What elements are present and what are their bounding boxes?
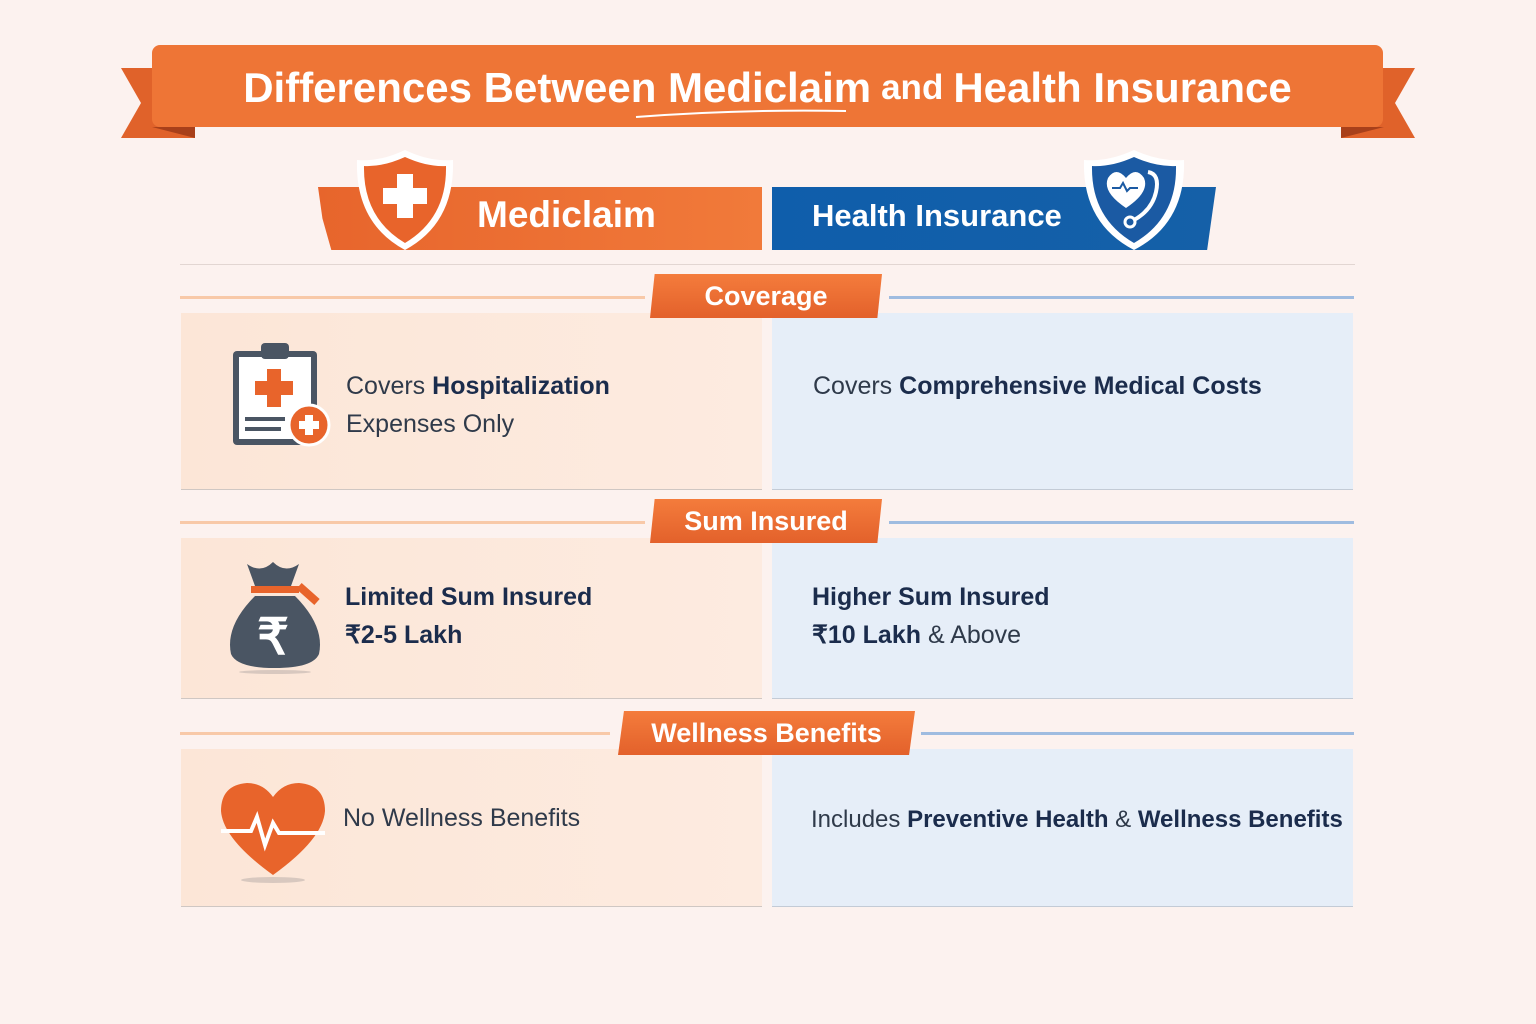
header: Mediclaim bbox=[318, 150, 762, 250]
tag: Wellness Benefits: Wellness Benefits bbox=[651, 718, 882, 748]
panel: sum health insurance: ₹10 Lakh & Above bbox=[812, 621, 1021, 649]
icon: money bag bbox=[230, 562, 320, 674]
icon: money bag: ₹ bbox=[257, 609, 289, 665]
tag: Wellness Benefits bbox=[618, 711, 915, 755]
text: Expenses Only bbox=[346, 410, 514, 438]
header: Health Insurance bbox=[772, 150, 1216, 250]
panel: sum mediclaim: Limited Sum Insured bbox=[345, 583, 592, 611]
tag: Sum Insured: Sum Insured bbox=[684, 506, 848, 536]
text: Covers Hospitalization bbox=[346, 372, 610, 400]
icon: clipboard bbox=[233, 343, 330, 446]
panel: sum health insurance bbox=[772, 538, 1353, 699]
panel: wellness mediclaim: No Wellness Benefits bbox=[343, 804, 580, 832]
title text: and bbox=[881, 68, 943, 107]
panel: coverage health insurance: Covers Comprehensive Medical Costs bbox=[813, 372, 1262, 400]
panel: wellness health insurance bbox=[772, 749, 1353, 907]
icon: blue shield with stethoscope heart bbox=[1084, 150, 1184, 250]
tag: Coverage bbox=[650, 274, 882, 318]
section: Wellness bbox=[180, 732, 610, 735]
panel: wellness mediclaim bbox=[181, 749, 762, 907]
text bbox=[346, 372, 610, 438]
title ribbon bbox=[121, 45, 1415, 138]
header text: Mediclaim bbox=[477, 194, 656, 235]
icon: orange shield with cross bbox=[357, 150, 453, 250]
panel: sum mediclaim bbox=[181, 538, 762, 699]
panel: sum health insurance: Higher Sum Insured bbox=[812, 583, 1050, 611]
panel: wellness health insurance: Includes Preventive Health & Wellness Benefits bbox=[811, 806, 1343, 833]
panel: coverage mediclaim bbox=[181, 313, 762, 490]
section: Sum Insured bbox=[180, 521, 645, 524]
icon: heart with pulse bbox=[221, 783, 325, 883]
panel: coverage health insurance bbox=[772, 313, 1353, 490]
section: Coverage bbox=[180, 296, 645, 299]
header text: Health Insurance bbox=[812, 198, 1062, 233]
tag: Sum Insured bbox=[650, 499, 882, 543]
panel: sum mediclaim: ₹2-5 Lakh bbox=[345, 621, 462, 649]
title text: Differences Between Mediclaim Health Insurance bbox=[243, 64, 1292, 111]
tag: Coverage: Coverage bbox=[704, 280, 828, 310]
